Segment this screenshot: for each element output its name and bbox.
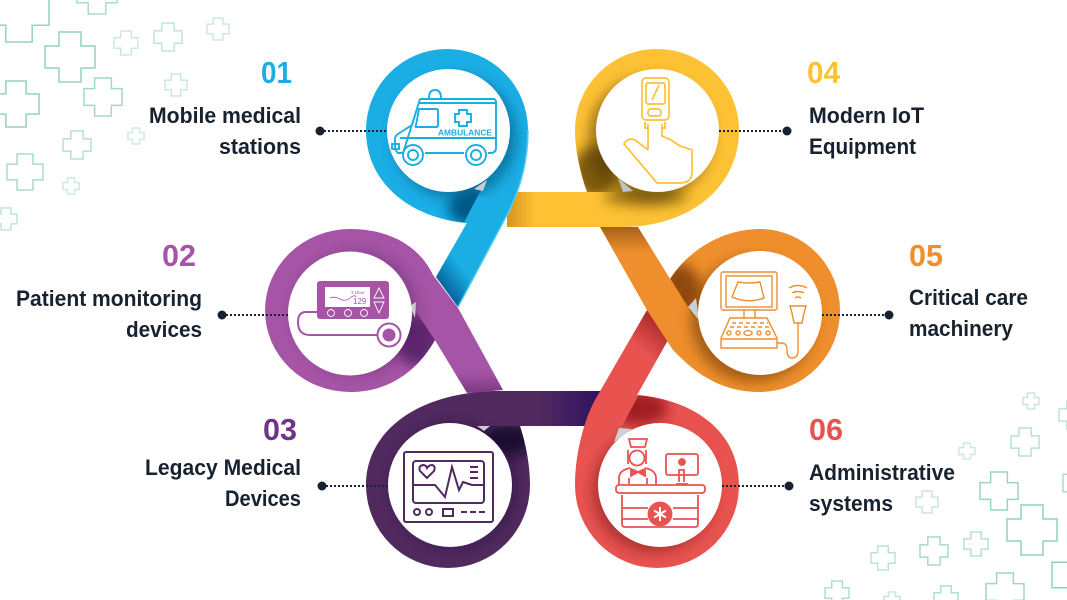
icon: infusion pump: 3 Hour [351, 290, 365, 295]
leader line 04 [719, 126, 792, 136]
icon: receptionist at desk [616, 439, 705, 527]
leader line 03 [318, 482, 388, 490]
icon: vital signs monitor [404, 452, 493, 522]
label 06: administrative systems: systems [809, 491, 893, 516]
segment 02: patient monitoring devices ring [265, 229, 503, 393]
leader line 02 [218, 310, 288, 320]
icon: ultrasound machine [721, 272, 807, 358]
icon: finger pulse oximeter [624, 78, 692, 183]
label 03: legacy medical devices [145, 412, 301, 511]
segment 06: administrative systems ring [575, 310, 739, 568]
label 04: modern IoT equipment: Modern IoT [809, 103, 925, 128]
label 01: mobile medical stations: Mobile medical [149, 103, 301, 128]
label 01: mobile medical stations [149, 55, 301, 159]
label 05: critical care machinery: 05 [909, 238, 943, 273]
label 04: modern IoT equipment: 04 [807, 55, 841, 90]
background crosses: top left [0, 0, 229, 230]
label 06: administrative systems [809, 412, 955, 516]
icon: infusion pump: 129 [353, 297, 367, 306]
label 02: patient monitoring devices: 02 [162, 238, 196, 273]
label 02: patient monitoring devices: devices [126, 317, 202, 342]
segment 01: mobile medical stations ring [366, 49, 528, 307]
label 06: administrative systems: Administrative [809, 460, 955, 485]
leader line 06 [722, 482, 794, 490]
segment 03: legacy medical devices ring [366, 388, 600, 568]
leader line 05 [822, 310, 894, 320]
label 05: critical care machinery [909, 238, 1028, 341]
label 03: legacy medical devices: Devices [225, 486, 301, 511]
label 03: legacy medical devices: 03 [263, 412, 297, 447]
segment 05: critical care machinery ring [600, 227, 840, 392]
background crosses: bottom right [825, 393, 1067, 600]
label 04: modern IoT equipment [807, 55, 925, 159]
label 06: administrative systems: 06 [809, 412, 843, 447]
label 04: modern IoT equipment: Equipment [809, 134, 917, 159]
label 05: critical care machinery: machinery [909, 316, 1014, 341]
icon: ambulance: AMBULANCE [438, 128, 492, 138]
label 01: mobile medical stations: 01 [261, 55, 292, 90]
label 02: patient monitoring devices: Patient monitoring [16, 286, 202, 311]
label 01: mobile medical stations: stations [219, 134, 301, 159]
label 05: critical care machinery: Critical care [909, 285, 1028, 310]
icon: ambulance [392, 90, 496, 165]
label 02: patient monitoring devices [16, 238, 202, 342]
label 03: legacy medical devices: Legacy Medical [145, 455, 301, 480]
icon: infusion pump [298, 281, 400, 346]
leader line 01 [316, 126, 387, 136]
segment 04: modern IoT equipment ring [507, 49, 739, 227]
